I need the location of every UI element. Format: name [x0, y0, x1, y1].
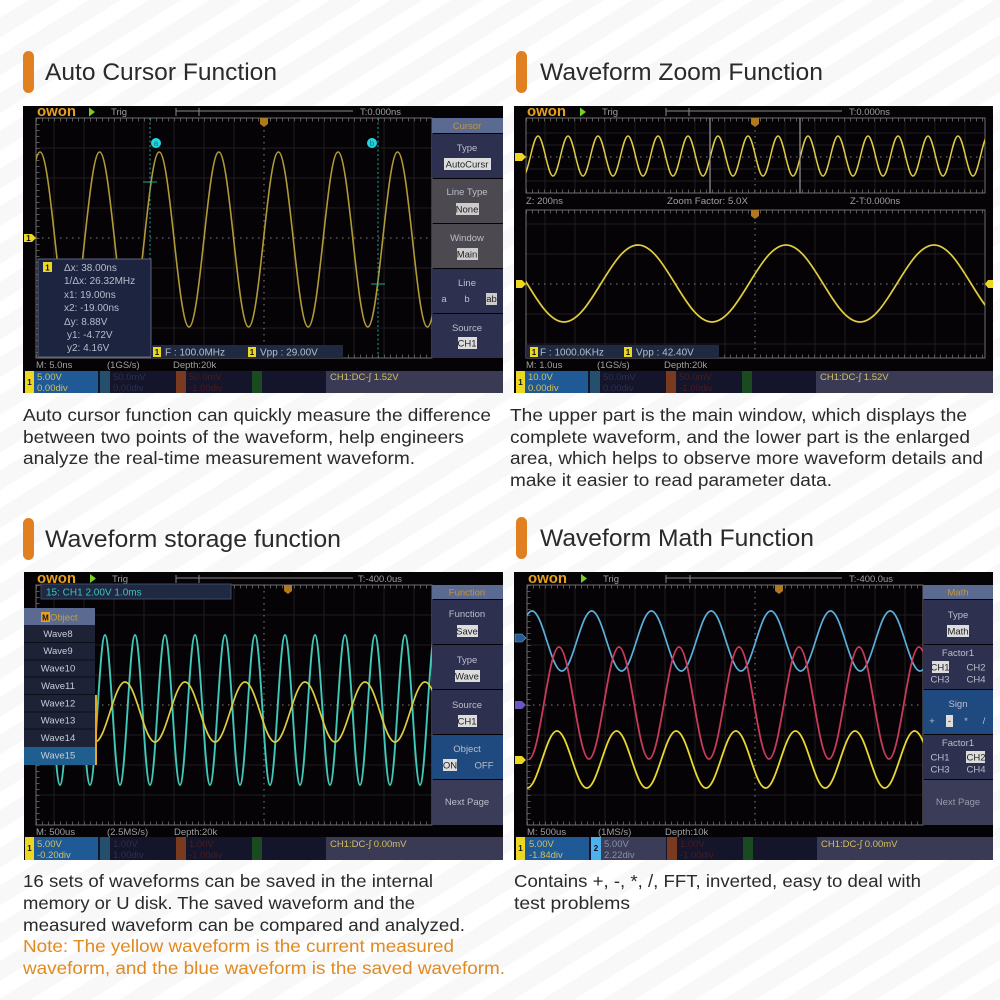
math menu: CH4 [966, 674, 986, 686]
top bar: Trig [112, 574, 128, 585]
cursor menu: b [464, 294, 470, 305]
status row: 1 [518, 844, 523, 853]
cursor menu: AutoCursr [446, 160, 488, 170]
description and note: memory or U disk. The saved waveform and the [23, 893, 415, 913]
description: between two points of the waveform, help engineers [23, 427, 464, 447]
zoom labels [526, 196, 900, 207]
math menu: Factor1 [942, 738, 974, 749]
object list: M [42, 614, 49, 622]
status row: 2.22div [604, 850, 635, 861]
function menu: Object [453, 744, 481, 755]
cursor readout box: Δy: 8.88V [64, 317, 108, 328]
cursor menu: Source [452, 323, 482, 334]
math menu: CH2 [966, 752, 986, 764]
measurement bar: F : 100.0MHz [165, 348, 225, 358]
cursor menu: CH1 [457, 338, 477, 350]
math menu: CH4 [966, 764, 986, 776]
top bar [527, 103, 890, 120]
yellow waveform [527, 731, 944, 788]
math menu: Math [947, 626, 969, 638]
status row: M: 500us [36, 827, 75, 838]
math menu: CH3 [930, 674, 950, 686]
description: test problems [514, 893, 630, 913]
panel: waveform storage function [22, 518, 505, 978]
function menu: Type [457, 655, 477, 666]
function menu: Function [449, 609, 485, 620]
math menu: Sign [948, 699, 968, 710]
status row [516, 827, 993, 861]
description: Contains +, -, *, /, FFT, inverted, easy to deal with [514, 871, 921, 891]
panel: waveform math function [502, 517, 993, 913]
status row: 5.00V [37, 839, 62, 850]
math menu: / [983, 716, 986, 727]
channel markers [515, 153, 993, 288]
status row: CH1:DC-∫ 1.52V [820, 372, 889, 383]
status row: 1.00V [113, 839, 138, 850]
status row: 50.0mV [603, 372, 636, 383]
cursor readout box: x2: -19.00ns [64, 303, 119, 314]
status row: 0.00div [113, 383, 144, 394]
status row: Depth:10k [665, 827, 709, 838]
status row: 10.0V [528, 372, 553, 383]
cursor readout box: Δx: 38.00ns [64, 263, 117, 274]
status row: -1.00div [189, 383, 223, 394]
trigger marker [775, 585, 783, 594]
description: area, which helps to observe more waveform details and [510, 448, 983, 468]
math menu [923, 585, 993, 825]
object list: Wave11 [41, 681, 75, 692]
function menu: Function [449, 588, 485, 598]
status row: -1.00div [680, 850, 714, 861]
status row: 5.00V [529, 839, 554, 850]
status row: (1GS/s) [107, 360, 140, 371]
status row: 1 [27, 378, 32, 387]
description: complete waveform, and the lower part is the enlarged [510, 427, 970, 447]
math menu: * [964, 716, 968, 727]
cursor readout box [38, 259, 151, 357]
math menu: CH3 [930, 764, 950, 776]
object list: Wave14 [41, 733, 75, 744]
heading: Waveform Math Function [540, 525, 814, 552]
object list: Wave12 [41, 698, 75, 710]
description: analyze the real-time measurement waveform. [23, 448, 415, 468]
accent bar [23, 51, 34, 93]
channel marker: 1 [26, 234, 31, 243]
math menu: - [948, 716, 951, 727]
top bar: owon [527, 103, 566, 120]
status row: (2.5MS/s) [107, 827, 148, 838]
yellow waveform [36, 151, 432, 328]
cursor a [143, 118, 161, 358]
status row: M: 500us [527, 827, 566, 838]
description: make it easier to read parameter data. [510, 470, 832, 490]
status row: M: 1.0us [526, 360, 563, 371]
cursor menu: Line [458, 278, 476, 289]
status row: 1.00div [113, 850, 144, 861]
status row: 1.00V [680, 839, 705, 850]
description: The upper part is the main window, which displays the [510, 405, 967, 425]
description and note [22, 871, 505, 978]
math menu: Factor1 [942, 648, 974, 659]
cursor menu: Main [457, 250, 477, 260]
heading: Waveform storage function [45, 526, 341, 553]
cursor readout box: y1: -4.72V [67, 330, 113, 341]
top bar: T:-400.0us [849, 574, 893, 585]
red math waveform [529, 647, 949, 759]
top bar [37, 570, 402, 587]
channel marker [24, 234, 36, 243]
oscilloscope screen: storage [24, 570, 503, 861]
cursor menu: Line Type [446, 187, 488, 198]
top bar: owon [528, 570, 567, 587]
object list [24, 608, 97, 765]
cursor readout box: 1/Δx: 26.32MHz [64, 276, 135, 287]
measurement bar: 1 [626, 348, 631, 357]
status row: CH1:DC-∫ 0.00mV [821, 839, 898, 850]
function menu: ON [443, 760, 457, 772]
panel: waveform zoom function [490, 51, 1000, 490]
cursor menu [432, 118, 503, 358]
object list: Object [50, 612, 78, 624]
zoom labels: Z: 200ns [526, 196, 563, 207]
math menu: Next Page [936, 797, 980, 808]
main window grid [526, 118, 985, 193]
accent bar [516, 51, 527, 93]
description: Auto cursor function can quickly measure the difference [23, 405, 491, 425]
math menu: CH1 [930, 752, 950, 764]
math menu: CH1 [930, 662, 950, 674]
math menu: Type [948, 610, 968, 621]
trigger markers [751, 118, 759, 219]
status row: -1.84div [529, 850, 563, 861]
top bar [528, 570, 893, 587]
status row: -0.20div [37, 850, 71, 861]
object list: Wave15 [41, 750, 75, 762]
measurement bar [526, 345, 719, 358]
trigger marker [284, 585, 292, 594]
status row: 50.0mV [189, 372, 222, 383]
zoom window frame [710, 118, 800, 193]
oscilloscope screen: zoom [490, 103, 1000, 394]
description and note: Note: The yellow waveform is the current measured [23, 936, 454, 956]
status row: (1MS/s) [598, 827, 631, 838]
zoomed waveform [490, 245, 1000, 322]
function menu: Save [456, 626, 478, 638]
zoom labels: Zoom Factor: 5.0X [667, 196, 749, 207]
top bar: T:0.000ns [360, 107, 401, 118]
object list: Wave13 [41, 716, 75, 726]
function menu: OFF [474, 760, 494, 772]
top bar: Trig [111, 107, 127, 118]
top bar: T:0.000ns [849, 107, 890, 118]
status row: 0.00div [603, 383, 634, 394]
description [510, 405, 983, 490]
zoom labels: Z-T:0.000ns [850, 196, 900, 207]
heading: Waveform Zoom Function [540, 59, 823, 86]
reference info bar: 15: CH1 2.00V 1.0ms [46, 588, 142, 598]
top bar [37, 103, 401, 120]
status row: 50.0mV [113, 372, 146, 383]
object list: Wave10 [41, 664, 75, 674]
object list: Wave9 [43, 646, 73, 657]
cursor menu: ab [486, 294, 497, 305]
status row [25, 360, 503, 394]
description and note: measured waveform can be compared and analyzed. [23, 915, 465, 935]
cursor a: a [154, 139, 159, 148]
current yellow waveform [97, 681, 432, 743]
status row: Depth:20k [664, 360, 708, 371]
status row: -1.00div [189, 850, 223, 861]
cursor menu: Type [457, 143, 477, 154]
status row: M: 5.0ns [36, 360, 73, 371]
zoom window grid [526, 210, 985, 358]
status row: 1 [27, 844, 32, 853]
panel: auto cursor function [10, 51, 503, 468]
measurement bar [151, 345, 343, 358]
measurement bar: 1 [250, 348, 255, 357]
status row: CH1:DC-∫ 1.52V [330, 372, 399, 383]
description [23, 405, 491, 468]
reference info bar [41, 584, 231, 599]
channel markers [515, 634, 526, 764]
function menu: Wave [455, 672, 479, 682]
status row: -1.00div [679, 383, 713, 394]
status row: (1GS/s) [597, 360, 630, 371]
function menu: CH1 [457, 716, 477, 728]
cursor b [367, 118, 385, 358]
status row: 1 [518, 378, 523, 387]
math menu: + [929, 716, 935, 727]
cursor menu: a [441, 294, 447, 305]
top bar: owon [37, 103, 76, 120]
function menu [432, 585, 503, 825]
oscilloscope screen: auto cursor [10, 103, 503, 394]
cursor menu: Cursor [453, 121, 481, 132]
math menu: CH2 [966, 662, 986, 674]
measurement bar: F : 1000.0KHz [540, 348, 604, 358]
measurement bar: Vpp : 29.00V [260, 348, 318, 358]
cursor readout box: y2: 4.16V [67, 343, 110, 354]
status row: 5.00V [37, 372, 62, 383]
description and note: waveform, and the blue waveform is the saved waveform. [22, 958, 505, 978]
top bar: owon [37, 570, 76, 587]
status row: 5.00V [604, 839, 629, 850]
top bar: T:-400.0us [358, 574, 402, 585]
function menu: Source [452, 700, 482, 711]
top bar: Trig [603, 574, 619, 585]
trigger marker [260, 118, 268, 127]
cursor readout box: x1: 19.00ns [64, 290, 116, 301]
cursor b: b [370, 139, 375, 148]
status row: 0.00div [37, 383, 68, 394]
function menu: Next Page [445, 797, 489, 808]
cursor readout box: 1 [45, 264, 50, 272]
description [514, 871, 921, 913]
cursor menu: Window [450, 233, 484, 244]
saved teal waveform [30, 635, 435, 785]
object list: Wave8 [43, 629, 73, 640]
measurement bar: 1 [532, 348, 537, 357]
top bar: Trig [602, 107, 618, 118]
cursor menu: None [456, 204, 478, 216]
accent bar [516, 517, 527, 559]
status row [516, 360, 993, 394]
description and note: 16 sets of waveforms can be saved in the internal [23, 871, 433, 891]
measurement bar: Vpp : 42.40V [636, 348, 694, 358]
status row: 2 [594, 844, 599, 853]
blue waveform [502, 611, 950, 671]
heading: Auto Cursor Function [45, 59, 277, 86]
status row: 1.00V [189, 839, 214, 850]
status row: Depth:20k [173, 360, 217, 371]
status row: CH1:DC-∫ 0.00mV [330, 839, 407, 850]
status row [25, 827, 503, 861]
oscilloscope screen: math [502, 570, 993, 861]
accent bar [23, 518, 34, 560]
math menu: Math [947, 588, 969, 598]
measurement bar: 1 [155, 348, 160, 357]
main window waveform [523, 136, 988, 176]
status row: Depth:20k [174, 827, 218, 838]
status row: 0.00div [528, 383, 559, 394]
status row: 50.0mV [679, 372, 712, 383]
